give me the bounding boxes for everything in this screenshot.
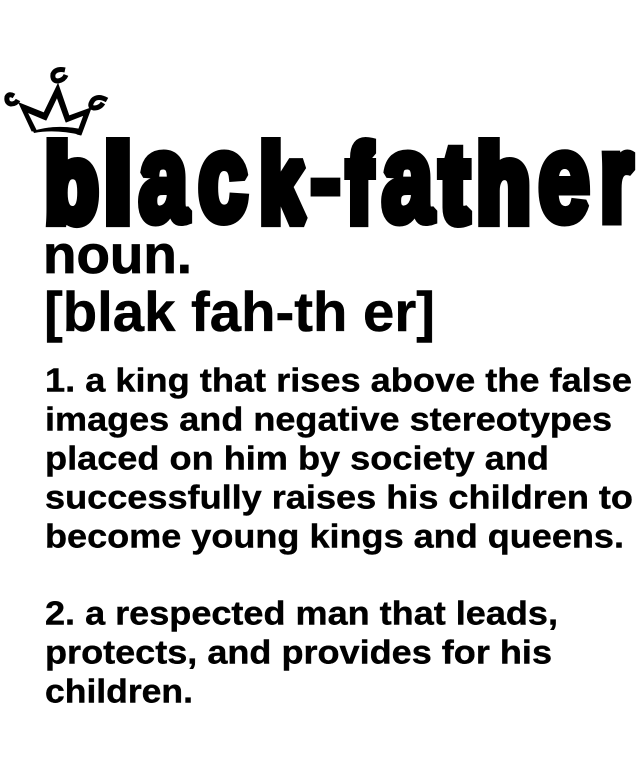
title: k — [260, 123, 305, 244]
title: t — [440, 123, 468, 244]
title: e — [538, 110, 590, 248]
title: a — [382, 110, 434, 248]
definition 2 — [45, 594, 558, 710]
title: a — [139, 110, 189, 248]
title: l — [105, 123, 131, 244]
definition 2: protects, and provides for his — [45, 634, 552, 670]
pronunciation: [blak fah-th er] — [44, 280, 435, 343]
definition 1: 1. a king that rises above the false — [45, 362, 632, 398]
definition 1: placed on him by society and — [45, 440, 549, 476]
definition 2: children. — [45, 672, 193, 710]
title: b — [45, 123, 98, 244]
definition 1: successfully raises his children to — [45, 478, 633, 516]
icon: crown — [7, 70, 107, 135]
definition 2: 2. a respected man that leads, — [45, 594, 558, 632]
title: f — [347, 123, 373, 244]
definition 1: become young kings and queens. — [45, 518, 624, 554]
definition 1 — [45, 362, 633, 554]
title: - — [310, 117, 342, 238]
title: c — [198, 110, 248, 246]
part of speech: noun. — [43, 225, 192, 285]
definition 1: images and negative stereotypes — [45, 400, 612, 438]
title: h — [477, 123, 530, 244]
